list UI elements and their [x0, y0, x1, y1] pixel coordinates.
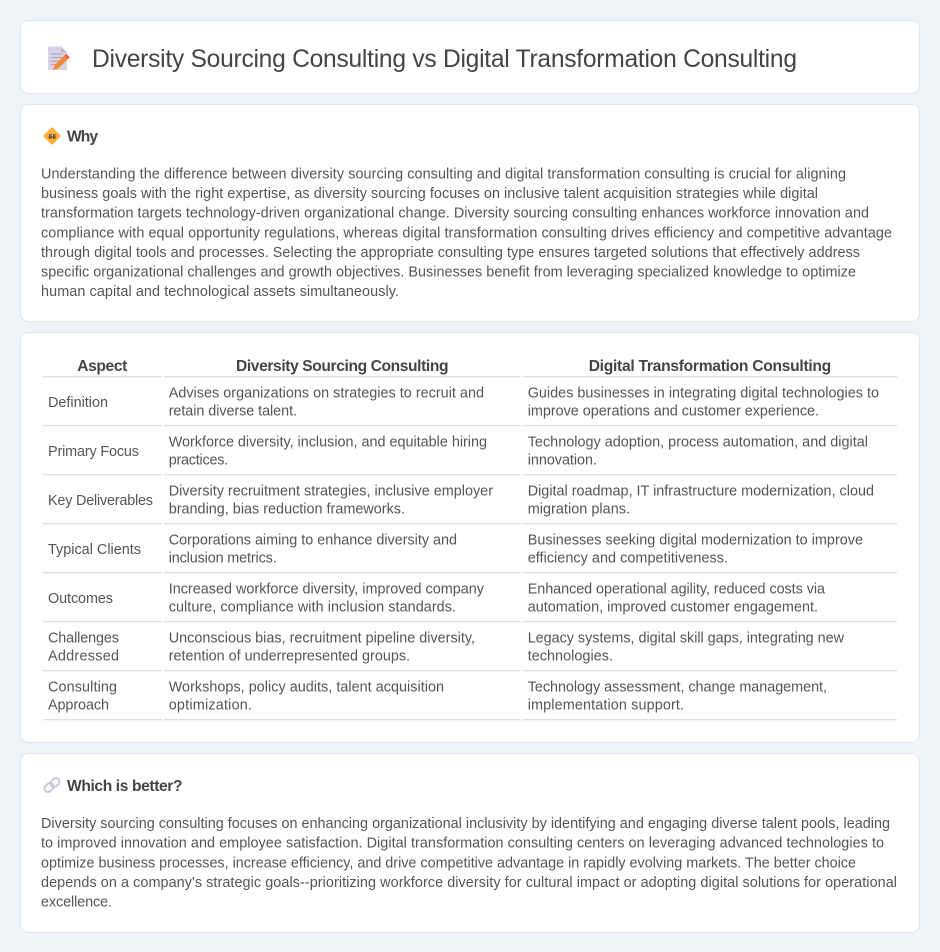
- table row: definition: improve operations and customer experience.: [528, 404, 819, 420]
- text block: which is better paragraph: excellence.: [41, 894, 112, 910]
- text block: why paragraph: specific organizational challenges and growth objectives. Businesses benefit from leveraging specialized knowledge to optimize: [41, 265, 856, 281]
- table row: consulting approach: [48, 680, 827, 714]
- table row: primary focus: Technology adoption, process automation, and digital: [528, 435, 868, 451]
- table row: consulting approach: Consulting: [48, 680, 117, 696]
- table row: consulting approach: implementation support.: [528, 698, 684, 714]
- title: Diversity Sourcing Consulting vs Digital Transformation Consulting: [92, 46, 797, 73]
- table row: challenges addressed: retention of underrepresented groups.: [169, 649, 410, 665]
- text block: why paragraph: Understanding the difference between diversity sourcing consulting and digital transformation consulting is crucial for aligning: [41, 166, 846, 182]
- table row: typical clients: efficiency and competitiveness.: [528, 551, 728, 567]
- table row: key deliverables: migration plans.: [528, 502, 630, 518]
- table row: consulting approach: optimization.: [169, 698, 252, 714]
- table row: typical clients: Typical Clients: [48, 542, 141, 558]
- panel: comparison table: [20, 332, 920, 742]
- text block: which is better paragraph: to improved innovation and employee satisfaction. Digital transformation consulting centers on leveraging advanced technologies to: [41, 836, 884, 852]
- heading: why: Why: [67, 128, 98, 146]
- text block: which is better paragraph: [41, 816, 897, 910]
- text block: why paragraph: transformation targets technology-driven organizational change. Diversity sourcing consulting enhances workforce innovation and: [41, 206, 869, 222]
- text block: why paragraph: compliance with equal opportunity regulations, whereas digital transformation consulting drives efficiency and competitive advantage: [41, 225, 892, 241]
- table row: key deliverables: Digital roadmap, IT infrastructure modernization, cloud: [528, 484, 874, 500]
- table row: key deliverables: branding, bias reduction frameworks.: [169, 502, 405, 518]
- table row: definition: retain diverse talent.: [169, 404, 297, 420]
- table row: key deliverables: Key Deliverables: [48, 493, 153, 509]
- table row: outcomes: culture, compliance with inclusion standards.: [169, 600, 456, 616]
- table row: typical clients: Businesses seeking digital modernization to improve: [528, 533, 863, 549]
- table row: consulting approach: Technology assessment, change management,: [528, 680, 827, 696]
- table row: consulting approach: Approach: [48, 698, 109, 714]
- table row: challenges addressed: Addressed: [48, 649, 119, 665]
- table row: outcomes: Outcomes: [48, 591, 113, 607]
- heading: which is better: Which is better?: [67, 778, 182, 795]
- table header row: Aspect: [77, 358, 127, 375]
- text block: why paragraph: through digital tools and processes. Selecting the appropriate consulting type ensures targeted solutions that effectively address: [41, 245, 860, 261]
- table row: typical clients: Corporations aiming to enhance diversity and: [169, 533, 457, 549]
- table row: challenges addressed: technologies.: [528, 649, 613, 665]
- table row: primary focus: Workforce diversity, inclusion, and equitable hiring: [169, 435, 487, 451]
- text block: why paragraph: business goals with the right expertise, as diversity sourcing focuses on inclusive talent acquisition strategies while digital: [41, 186, 818, 202]
- icon: chain link: [43, 776, 61, 794]
- table row: consulting approach: Workshops, policy audits, talent acquisition: [169, 680, 444, 696]
- table row: definition: [48, 386, 879, 420]
- table row: primary focus: practices.: [169, 453, 228, 469]
- table row: challenges addressed: [48, 631, 845, 665]
- table row: outcomes: automation, improved customer engagement.: [528, 600, 818, 616]
- table row: key deliverables: [48, 484, 874, 518]
- table row: challenges addressed: Legacy systems, digital skill gaps, integrating new: [528, 631, 845, 647]
- table header row: [77, 358, 831, 375]
- table row: definition: Definition: [48, 395, 108, 411]
- table row: definition: Advises organizations on strategies to recruit and: [169, 386, 484, 402]
- panel: why: [20, 104, 920, 322]
- table row: outcomes: Enhanced operational agility, reduced costs via: [528, 582, 825, 598]
- table row: typical clients: inclusion metrics.: [169, 551, 277, 567]
- table row: primary focus: Primary Focus: [48, 444, 139, 460]
- table row: definition: Guides businesses in integrating digital technologies to: [528, 386, 879, 402]
- table row: challenges addressed: Challenges: [48, 631, 119, 647]
- panel: which is better: [20, 754, 920, 932]
- text block: which is better paragraph: optimize business processes, increase efficiency, and drive competitive advantage in rapidly evolving markets. The better choice: [41, 855, 856, 871]
- table row: key deliverables: Diversity recruitment strategies, inclusive employer: [169, 484, 493, 500]
- panel: title header: [20, 20, 920, 94]
- text block: which is better paragraph: Diversity sourcing consulting focuses on enhancing organizational inclusivity by identifying and engaging diverse talent pools, leading: [41, 816, 890, 832]
- table row: outcomes: Increased workforce diversity, improved company: [169, 582, 485, 598]
- text block: why paragraph: human capital and technological assets simultaneously.: [41, 284, 399, 300]
- table row: challenges addressed: Unconscious bias, recruitment pipeline diversity,: [169, 631, 475, 647]
- table row: typical clients: [48, 533, 863, 567]
- table row: outcomes: [48, 582, 825, 616]
- table row: primary focus: innovation.: [528, 453, 597, 469]
- table row: primary focus: [48, 435, 868, 469]
- text block: why paragraph: [41, 166, 892, 300]
- text block: which is better paragraph: depends on a company's strategic goals--prioritizing workforce diversity for cultural impact or adopting digital solutions for operational: [41, 875, 897, 891]
- table header row: Diversity Sourcing Consulting: [236, 358, 448, 375]
- icon: orange diamond sign: [43, 127, 61, 145]
- icon: document with pencil: [48, 46, 70, 70]
- table header row: Digital Transformation Consulting: [589, 358, 831, 375]
